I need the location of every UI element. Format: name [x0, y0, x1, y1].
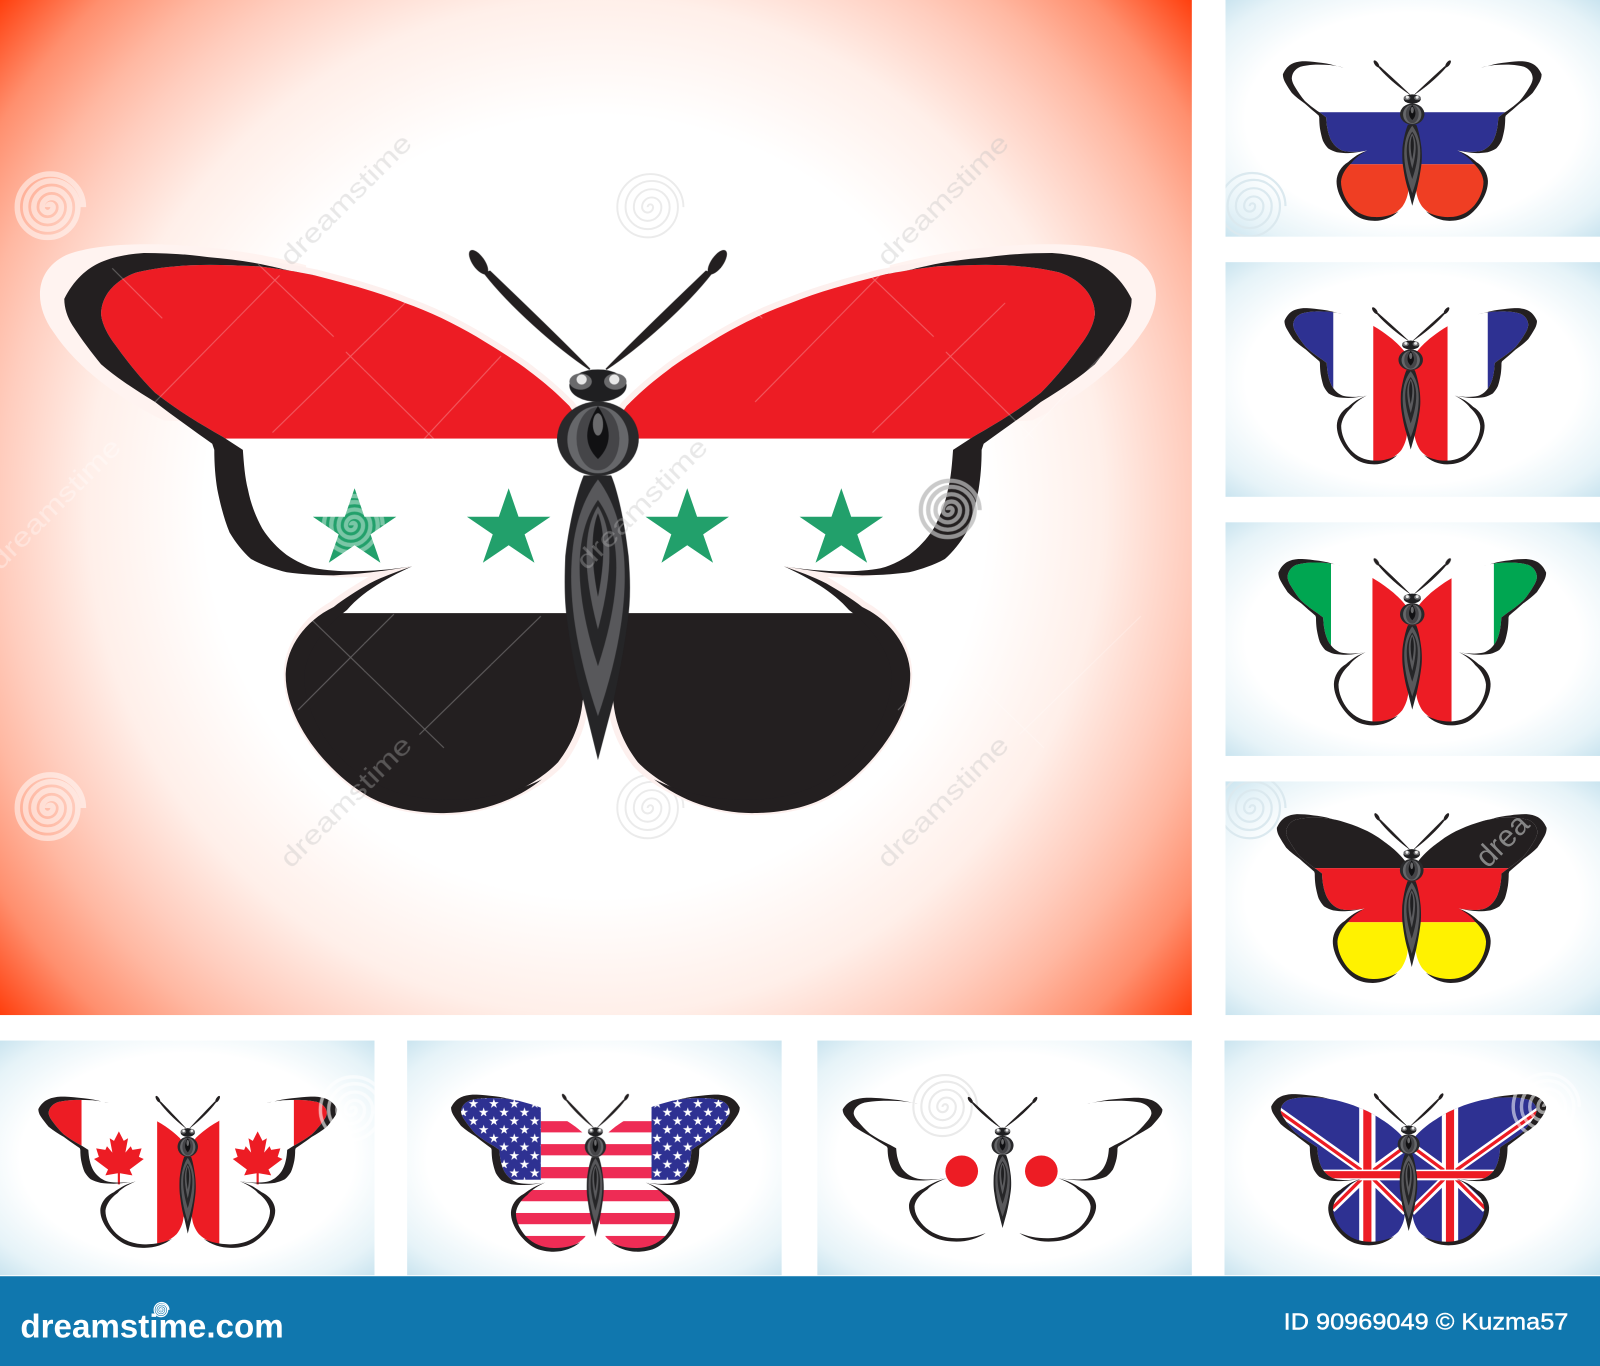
Italy wing borders — [1278, 559, 1546, 725]
Germany wing borders — [1277, 814, 1547, 983]
France wing borders — [1284, 308, 1537, 464]
footer banner — [0, 1276, 1600, 1366]
main butterfly flag wings — [101, 264, 1095, 800]
Canada wing borders — [38, 1097, 337, 1248]
image id and credit: ID 90969049 © Kuzma57 — [1284, 1308, 1568, 1334]
banner logo text: dreamstime.com — [20, 1308, 284, 1345]
Japan red discs — [945, 1155, 1058, 1187]
watermark spirals on main panel — [17, 174, 683, 838]
Italy flag wings — [1288, 562, 1537, 722]
Japan wing borders — [843, 1098, 1162, 1242]
Russia flag wings — [1319, 112, 1505, 218]
diagonal watermark text, main panel: dreamstime — [871, 128, 1015, 272]
main butterfly wing borders — [64, 253, 1132, 813]
France body — [1371, 306, 1450, 450]
USA body — [561, 1093, 630, 1237]
USA flag wings — [461, 1098, 730, 1248]
UK body — [1373, 1092, 1444, 1231]
Russia wing borders — [1283, 61, 1542, 221]
panel: UK butterfly — [1224, 1041, 1600, 1275]
diagonal watermark text, main panel: dreamstime — [871, 730, 1015, 873]
Russia body — [1372, 59, 1452, 206]
Canada body — [155, 1095, 221, 1234]
spiral watermarks over wings — [324, 481, 980, 552]
main butterfly green stars — [313, 488, 883, 563]
panel: USA butterfly — [407, 1041, 782, 1275]
diagonal watermark text, main panel: dreamstime — [570, 432, 714, 576]
main butterfly body — [465, 247, 731, 760]
panel: Japan butterfly — [817, 1041, 1192, 1275]
USA wing borders — [451, 1095, 740, 1252]
Italy body — [1372, 557, 1452, 710]
panel: main Iraq flag butterfly — [0, 0, 1192, 1015]
UK wing borders — [1271, 1094, 1546, 1245]
banner logo spiral — [154, 1303, 169, 1317]
panel: France butterfly — [1226, 262, 1600, 497]
diagonal watermark text, main panel — [0, 128, 1015, 873]
panel: Canada butterfly — [0, 1041, 386, 1275]
Canada flag wings — [48, 1100, 327, 1244]
Germany flag wings — [1286, 818, 1538, 979]
diagonal watermark text, main panel: dreamstime — [274, 730, 418, 873]
France flag wings — [1293, 311, 1528, 461]
Japan body — [967, 1096, 1038, 1228]
Germany body — [1373, 812, 1450, 967]
faint crossing watermark lines over wings — [112, 264, 1141, 748]
panel: Germany butterfly — [1219, 775, 1600, 1015]
Canada maple leaves — [94, 1131, 283, 1184]
panel: Russia butterfly — [1219, 0, 1600, 237]
panel: Italy butterfly — [1226, 522, 1600, 756]
main butterfly halo — [40, 244, 1156, 809]
diagonal watermark text, main panel: dreamstime — [274, 128, 418, 272]
UK flag wings — [1280, 1097, 1537, 1242]
Germany diagonal watermark: drea — [1469, 806, 1537, 874]
